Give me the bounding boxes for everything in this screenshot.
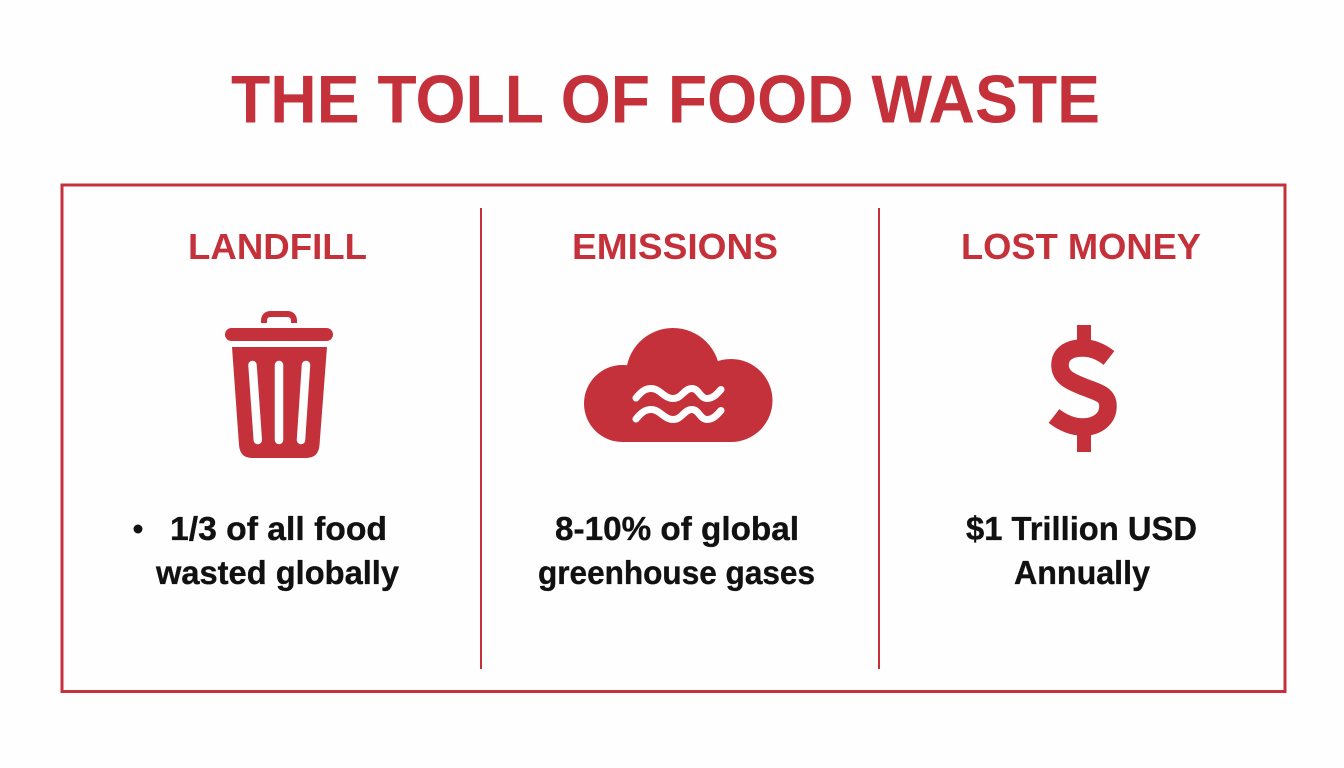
text: lost money statistic: $1 Trillion USD	[966, 510, 1197, 547]
text: landfill statistic: wasted globally	[155, 554, 400, 591]
panel frame	[62, 185, 1285, 692]
text: emissions statistic: 8-10% of global	[555, 510, 799, 547]
icon: cloud with gas waves	[584, 328, 772, 442]
text: lost money statistic	[966, 510, 1197, 591]
title: THE TOLL OF FOOD WASTE	[231, 62, 1100, 138]
heading: landfill: LANDFILL	[188, 226, 367, 267]
divider: emissions and lost money	[878, 208, 880, 669]
text: emissions statistic: greenhouse gases	[538, 554, 815, 591]
icon: dollar sign	[1054, 325, 1109, 452]
panel: lost money	[961, 226, 1201, 591]
heading: emissions: EMISSIONS	[572, 226, 778, 267]
text: lost money statistic: Annually	[1014, 554, 1151, 591]
text: landfill statistic	[155, 510, 400, 591]
divider: landfill and emissions	[480, 208, 482, 669]
bullet	[134, 524, 142, 534]
heading: lost money: LOST MONEY	[961, 226, 1201, 267]
text: emissions statistic	[538, 510, 815, 591]
panel: emissions	[538, 226, 815, 591]
icon: trash can	[225, 314, 333, 458]
panel: landfill	[134, 226, 400, 591]
text: landfill statistic: 1/3 of all food	[170, 510, 387, 547]
